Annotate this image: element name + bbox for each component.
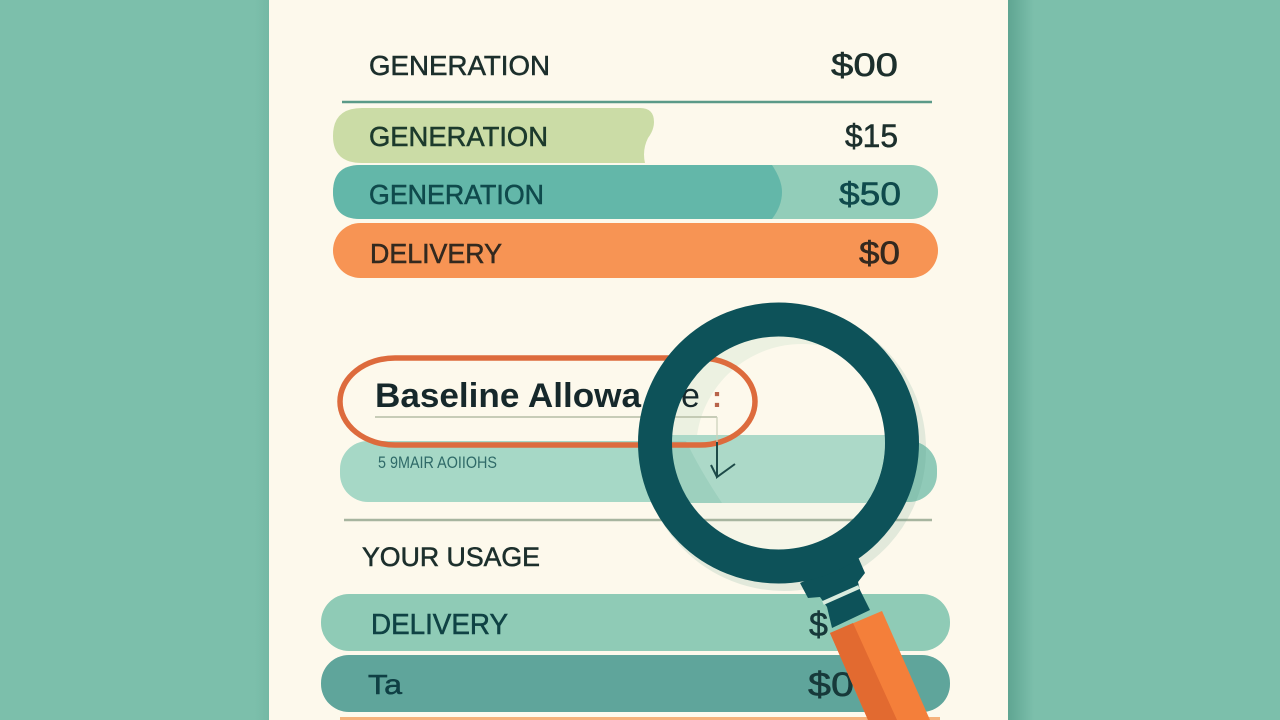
row: usage tax: Ta (368, 669, 402, 700)
row: usage tax (321, 655, 950, 712)
heading: generation: GENERATION (369, 50, 550, 81)
ring: lens frame (655, 320, 902, 566)
callout: baseline allowance: e (681, 377, 700, 415)
divider line (344, 519, 932, 521)
callout: baseline allowance: Baseline Allowa (375, 377, 642, 415)
row: generation teal: GENERATION (369, 179, 544, 210)
row: generation light green (333, 108, 898, 163)
panel: paper bill (269, 0, 1008, 720)
section: header row (342, 47, 932, 102)
row: delivery orange: $0 (859, 235, 900, 271)
arrow: down indicator (711, 442, 735, 477)
neck: dark connector (800, 557, 870, 628)
row: generation light green: GENERATION (369, 121, 548, 152)
row: generation light green: $15 (845, 118, 898, 154)
row: allowance detail bar: 5 9MAIR AOIIOHS (378, 453, 497, 472)
handle: orange grip (830, 611, 930, 720)
row: cut-off orange bar (340, 717, 940, 720)
icon: magnifying glass (651, 316, 930, 720)
callout: baseline allowance (340, 358, 755, 445)
row: generation teal (333, 165, 938, 219)
magnified lens area (672, 336, 885, 503)
section: your usage: YOUR USAGE (362, 542, 540, 572)
amount: header total: $00 (831, 47, 898, 83)
row: delivery orange: DELIVERY (370, 238, 502, 269)
row: usage tax: $0 (808, 666, 854, 704)
infographic: utility bill under a magnifying glass (269, 0, 1026, 720)
row: usage delivery (321, 594, 950, 651)
row: delivery orange (333, 223, 938, 278)
row: usage delivery: DELIVERY (371, 609, 508, 641)
row: allowance detail bar (340, 441, 937, 502)
row: usage delivery: $ (809, 606, 828, 644)
callout: baseline allowance: : (712, 381, 722, 414)
row: generation teal: $50 (839, 176, 901, 212)
